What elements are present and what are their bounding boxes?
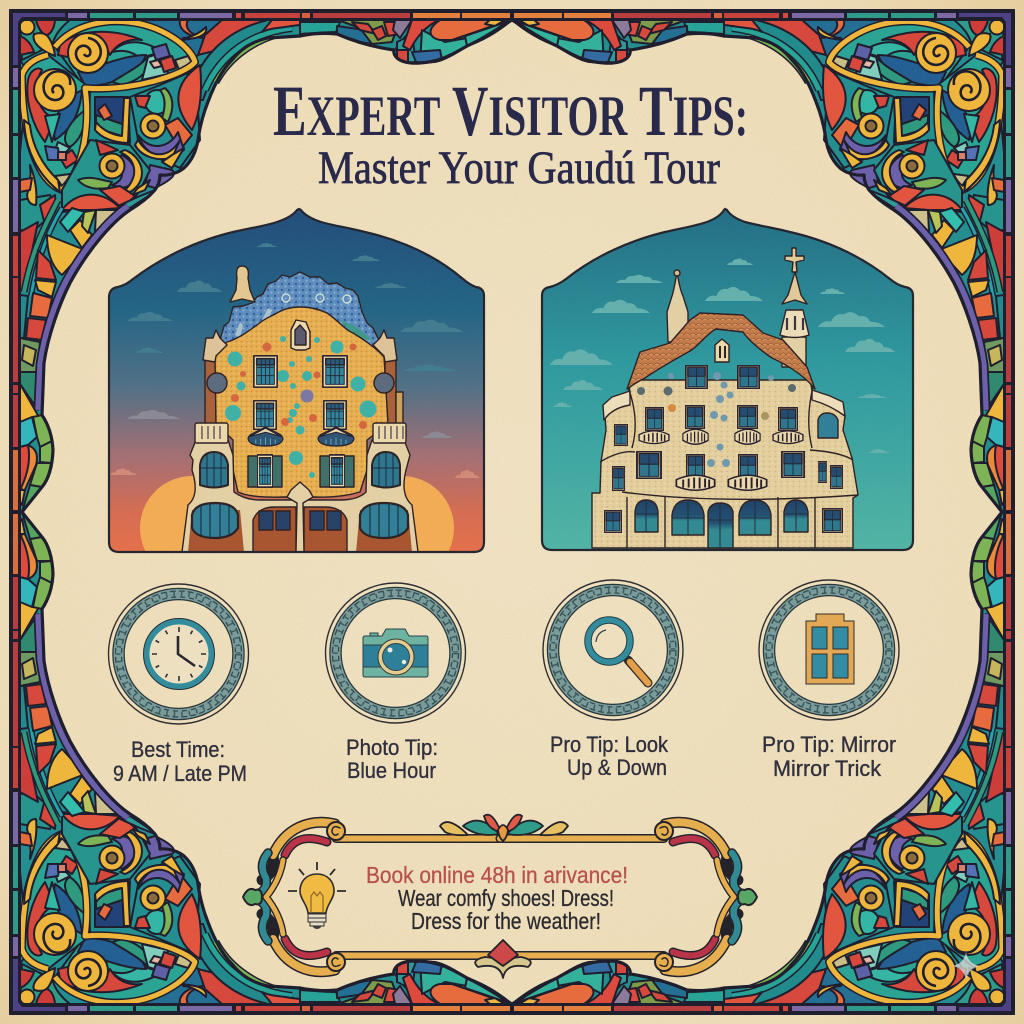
side towers [182,440,418,552]
icon: magnifying glass [588,620,648,683]
bottom ornament [475,940,531,978]
right ornament group [130,70,200,168]
lower windows with shutters [248,456,258,487]
border quarter: top right corner [512,10,1014,512]
icon: light bulb [288,862,346,929]
parapet left and right ornaments [203,330,227,362]
fan pieces [47,235,85,275]
title line two: Master Your Gaudú Tour [318,142,720,194]
cross [785,248,804,272]
butterfly upper wing [55,21,195,89]
label: Pro Tip: Mirror [762,732,896,757]
arc bands left [24,200,58,292]
arc bands [190,20,300,100]
watermark star [952,952,980,980]
label: Blue Hour [347,758,436,783]
border quarter: top left corner [10,10,512,512]
balcony tops [195,423,228,443]
gold swirls [68,33,108,73]
cornice lines [600,387,858,499]
label [113,737,247,786]
label [762,732,896,781]
facade rosettes [637,372,796,467]
callout: booking advice [243,815,757,978]
title [273,71,748,194]
panel: daytime house illustration [538,205,918,555]
balconies [248,427,283,446]
tile ornaments [225,336,376,478]
border quarter: bottom left corner [10,512,512,1014]
arcades [188,510,244,552]
sun [140,476,454,551]
ornate ring [543,580,683,720]
ornate ring [108,584,248,724]
corner tiles [20,20,70,60]
terracotta roof [627,313,815,389]
tip: mirror trick [759,580,899,781]
clouds [550,258,895,453]
house: stone facade with towers [592,248,858,548]
label: Pro Tip: Look [550,732,669,757]
tip: best time [108,584,248,786]
icon: window [806,614,854,684]
windows row three [637,452,661,478]
tip: look up and down [543,580,683,780]
side strips [205,358,216,428]
left drip ornaments [20,195,55,232]
side square windows [605,511,621,532]
balconies row one [639,431,669,444]
border quarter: bottom right corner [512,512,1014,1014]
label: 9 AM / Late PM [113,761,247,786]
label: Best Time: [131,737,225,762]
attic window [715,339,729,362]
ornate ring [759,580,899,720]
arcade arches [635,500,808,548]
daytime panel outline [542,209,913,550]
sunset sky [110,210,483,551]
parapets [603,391,630,420]
chimney [230,266,255,302]
windows upper [254,356,277,387]
top centre wing [300,20,420,50]
ornate ring [326,583,466,723]
callout text [366,862,628,934]
attic window [291,320,310,350]
title line one: EXPERT VISITOR TIPS: [273,71,748,151]
house: casa batllo style [182,266,418,552]
icon: camera [363,629,428,677]
wings and main body [592,380,858,548]
dark line two: Dress for the weather! [411,908,601,934]
side round windows [207,373,227,393]
label: Mirror Trick [773,756,882,781]
central column [287,482,313,552]
windows row two [646,408,663,430]
side lobe [20,384,39,422]
arched tower windows [200,452,228,488]
windows row one [686,366,707,388]
border strip [10,10,512,512]
dark line one: Wear comfy shoes! Dress! [398,885,614,911]
butterfly gold outlines [22,21,195,190]
label [346,735,438,783]
tip: photo [326,583,466,783]
panel: sunset house illustration [105,205,490,580]
mosaic roof [215,272,385,350]
teal sky [538,205,918,555]
lower ornament group [62,140,150,212]
yellow facade [215,307,388,497]
sunset panel outline [109,209,484,552]
top ornament [440,815,568,841]
label [550,732,669,780]
butterfly left wing [22,55,90,190]
towers [667,272,688,342]
callout frame [243,822,757,972]
centre diamond panel [95,97,130,143]
icon: clock [144,618,214,690]
red line: Book online 48h in arivance! [366,862,628,888]
clouds [128,243,463,371]
balconies row two [676,475,715,490]
label: Photo Tip: [346,735,438,760]
label: Up & Down [567,755,667,780]
